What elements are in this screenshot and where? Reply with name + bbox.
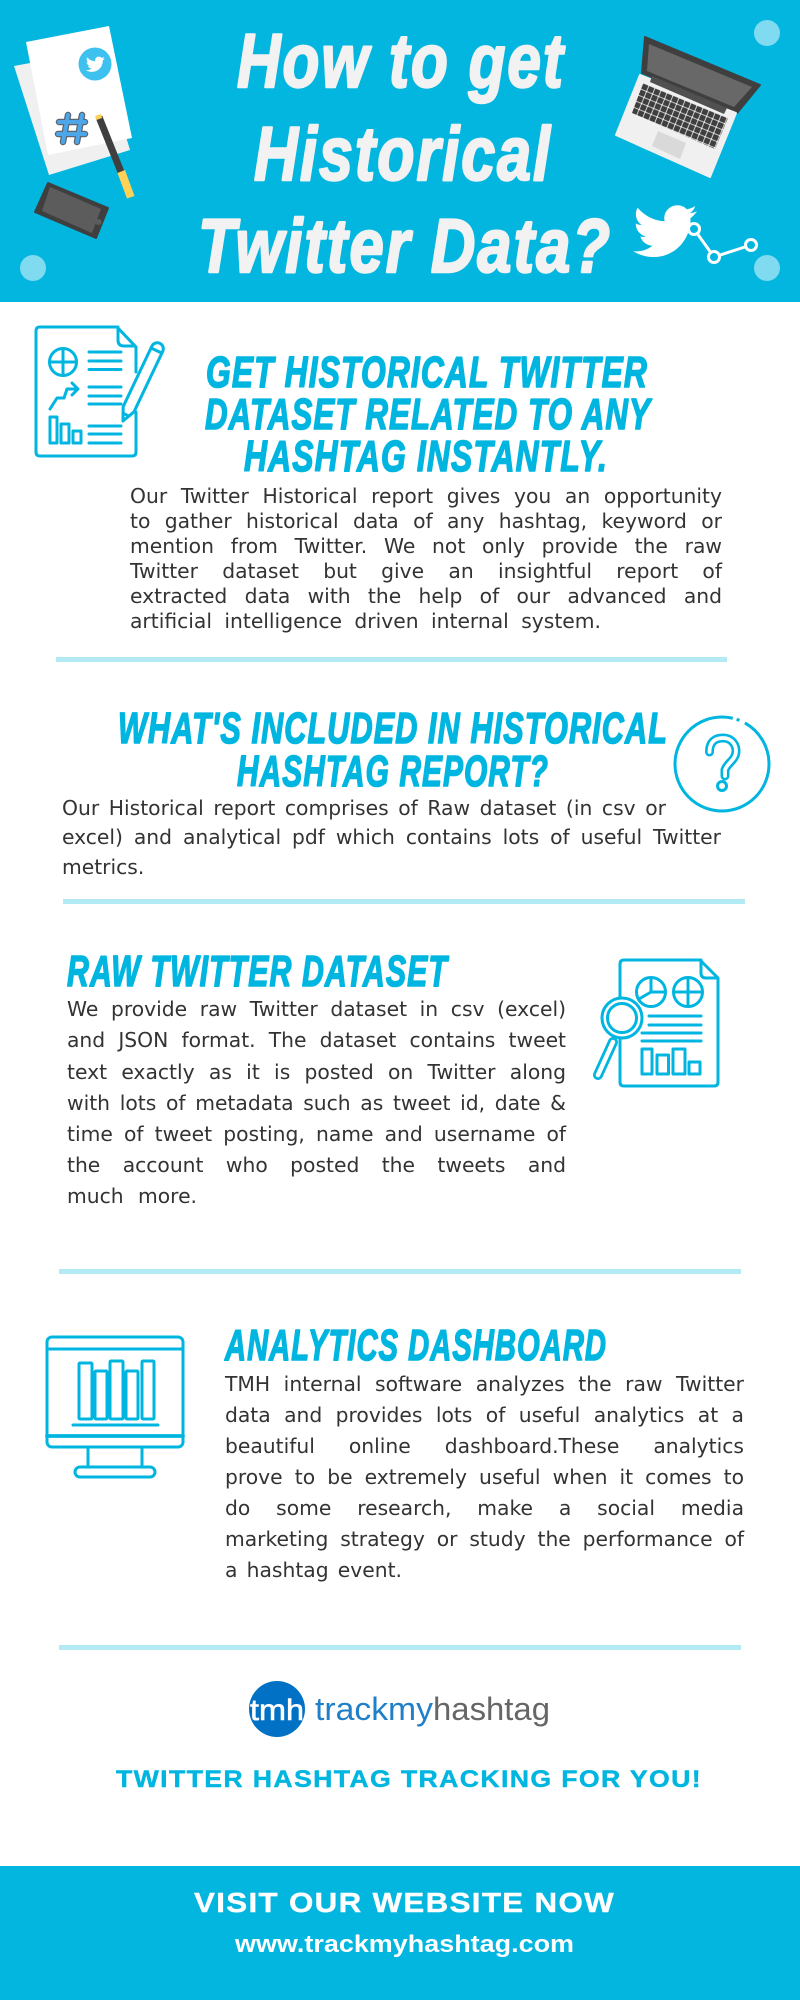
text: do some research, make a social media xyxy=(225,1496,744,1520)
text: beautiful online dashboard.These analytics xyxy=(225,1434,744,1458)
divider xyxy=(63,899,745,904)
icon: monitor with bar chart xyxy=(47,1337,183,1477)
text: much more. xyxy=(67,1184,197,1208)
text block: raw dataset xyxy=(67,997,566,1208)
icon: papers with twitter badge and hashtag xyxy=(14,26,132,175)
text: a hashtag event. xyxy=(225,1558,402,1582)
icon: smartphone xyxy=(35,183,108,238)
tagline: TWITTER HASHTAG TRACKING FOR YOU! xyxy=(116,1766,702,1793)
logo: trackmyhashtag xyxy=(249,1681,550,1737)
heading: get historical twitter dataset xyxy=(205,348,652,481)
logo: trackmyhashtag: hashtag xyxy=(433,1691,550,1727)
text block: analytics dashboard xyxy=(224,1372,744,1582)
text: Twitter dataset but give an insightful report of xyxy=(130,559,722,583)
text: Our Historical report comprises of Raw dataset (in csv or xyxy=(62,796,666,820)
text: prove to be extremely useful when it comes to xyxy=(225,1465,744,1489)
header band xyxy=(0,0,800,302)
text: Our Twitter Historical report gives you an opportunity xyxy=(130,484,722,508)
heading: what's included: HASHTAG REPORT? xyxy=(237,747,549,796)
divider xyxy=(59,1269,741,1274)
text: mention from Twitter. We not only provide the raw xyxy=(130,534,722,558)
text: TMH internal software analyzes the raw Twitter xyxy=(225,1372,744,1396)
text: the account who posted the tweets and xyxy=(67,1153,566,1177)
logo: trackmyhashtag: tmh xyxy=(250,1694,304,1727)
footer website url: www.trackmyhashtag.com xyxy=(234,1931,574,1958)
text block: historical report intro xyxy=(130,484,722,633)
footer band xyxy=(0,1866,800,2000)
text: data and provides lots of useful analytics at a xyxy=(225,1403,744,1427)
text: to gather historical data of any hashtag, keyword or xyxy=(130,509,722,533)
logo: trackmyhashtag: trackmy xyxy=(315,1691,433,1727)
text: We provide raw Twitter dataset in csv (excel) xyxy=(67,997,566,1021)
icon: twitter bird with data nodes xyxy=(633,205,756,262)
text: marketing strategy or study the performance of xyxy=(225,1527,744,1551)
text: time of tweet posting, name and username of xyxy=(67,1122,566,1146)
text: extracted data with the help of our advanced and xyxy=(130,584,722,608)
text: excel) and analytical pdf which contains lots of useful Twitter xyxy=(62,825,721,849)
icon: report document with pencil xyxy=(36,327,165,456)
heading: raw twitter dataset: RAW TWITTER DATASET xyxy=(67,947,449,996)
heading: what's included xyxy=(118,704,668,796)
text: with lots of metadata such as tweet id, date & xyxy=(67,1091,566,1115)
footer call to action: VISIT OUR WEBSITE NOW xyxy=(194,1887,615,1918)
text: metrics. xyxy=(62,855,144,879)
title: Twitter Data? xyxy=(198,204,612,289)
icon: pen xyxy=(95,114,134,198)
heading: get historical twitter dataset: HASHTAG INSTANTLY. xyxy=(244,432,608,481)
text: artificial intelligence driven internal system. xyxy=(130,609,601,633)
divider xyxy=(56,657,727,662)
text: and JSON format. The dataset contains tweet xyxy=(67,1028,566,1052)
title: Historical xyxy=(254,112,552,197)
heading: analytics dashboard: ANALYTICS DASHBOARD xyxy=(224,1321,607,1370)
title: How to get xyxy=(237,19,565,104)
header decorative dots xyxy=(20,20,780,281)
title xyxy=(198,19,612,289)
icon: question mark in circle xyxy=(675,717,769,811)
text block: what's included xyxy=(62,796,721,879)
icon: laptop xyxy=(616,37,760,177)
divider xyxy=(59,1645,741,1650)
text: text exactly as it is posted on Twitter along xyxy=(67,1060,566,1084)
icon: document with magnifier xyxy=(598,960,718,1086)
